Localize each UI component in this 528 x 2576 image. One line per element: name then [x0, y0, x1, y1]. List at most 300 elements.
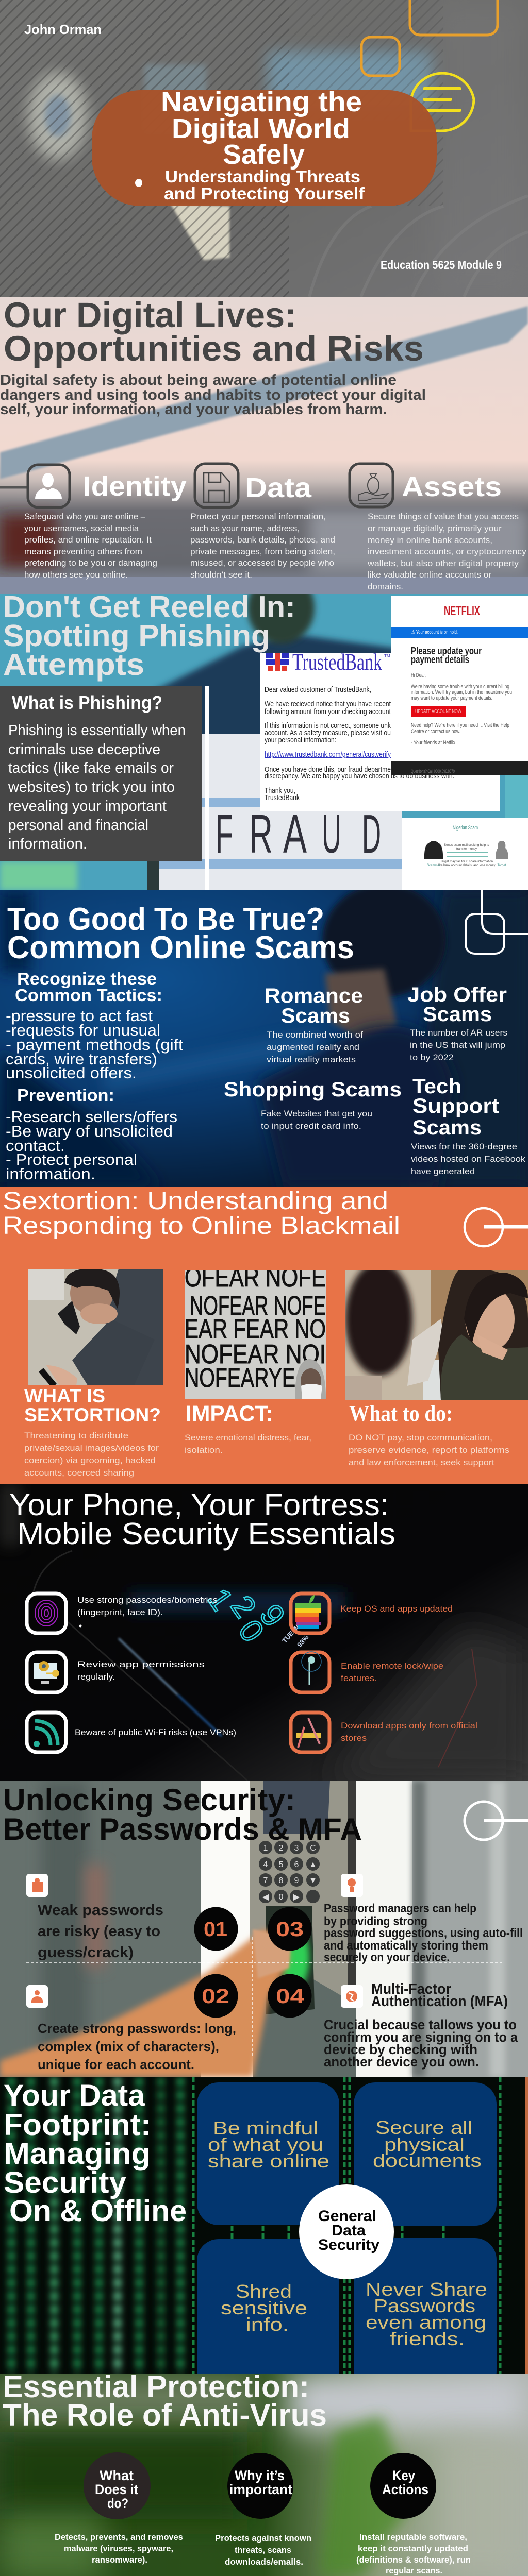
icon: globe [341, 1985, 363, 2008]
card: never share: Passwords [374, 2295, 475, 2316]
card: be mindful: of what you [208, 2134, 323, 2155]
column: impact: IMPACT: [186, 1401, 273, 1426]
panel: assets: domains. [368, 582, 403, 591]
heading: Better Passwords & MFA [3, 1812, 362, 1846]
title pill [92, 87, 437, 206]
author name: John Orman [24, 22, 102, 37]
fraud letters: A [283, 804, 307, 865]
heading: Opportunities and Risks [4, 329, 424, 368]
scam type: romance: Romance [265, 985, 363, 1007]
tip: passcodes: (fingerprint, face ID). [77, 1607, 163, 1617]
number badges: 02 [202, 1985, 229, 2008]
panel: data [190, 464, 335, 580]
icon: scammer [424, 841, 443, 859]
column: what is sextortion: WHAT IS [24, 1385, 105, 1406]
panel: netflix phishing email: Centre or contact us now. [411, 728, 460, 735]
column: why it's important: Why it’s [235, 2468, 285, 2483]
panel: what is phishing: tactics (like fake emails or [8, 760, 174, 776]
heading: Security [4, 2166, 126, 2199]
heading: Attempts [3, 648, 144, 682]
item 4: multi-factor authentication: Multi-Factor [371, 1981, 451, 1997]
heading [3, 1783, 362, 1846]
heading [9, 1488, 395, 1551]
main title: Navigating the [161, 87, 362, 117]
panel: nigerian scam diagram: Target [498, 864, 506, 867]
card: never share: even among [366, 2312, 486, 2333]
background: door lock fingerprint photo [0, 1781, 528, 2077]
photo: no fear wall [185, 1263, 326, 1399]
scam type: tech support: Support [412, 1095, 499, 1117]
column: what does it do: malware (viruses, spyware, [64, 2544, 173, 2553]
tip: official stores [291, 1713, 477, 1752]
item 4: multi-factor authentication: device by checking with [324, 2042, 477, 2057]
panel: what is phishing: Phishing is essentially when [8, 722, 186, 739]
panel: netflix phishing email: Questions? Call 0800.096.8879 [411, 769, 455, 774]
tip: permissions [27, 1652, 205, 1692]
column: why it's important [215, 2453, 311, 2567]
panel: netflix phishing email: UPDATE ACCOUNT NOW [415, 709, 461, 715]
scam type: tech support: Scams [412, 1116, 482, 1139]
keypad: 3 [294, 1844, 299, 1853]
column: what is sextortion [24, 1385, 161, 1478]
panel: netflix phishing email [391, 596, 528, 775]
tip: wifi [27, 1713, 236, 1752]
column: what to do: preserve evidence, report to platforms [349, 1445, 509, 1455]
card: shred [197, 2239, 339, 2394]
panel: netflix phishing email: - Your friends at Netflix [411, 740, 455, 746]
item 1: weak passwords: are risky (easy to [38, 1923, 160, 1940]
column: key actions: regular scans. [386, 2566, 442, 2575]
tip: passcodes: Use strong passcodes/biometrics [77, 1595, 218, 1605]
panel: trusted bank phishing email: following amount from your checking account [265, 707, 391, 716]
column: key actions: Key [392, 2468, 415, 2483]
scam type: job offer: in the US that will jump [410, 1040, 505, 1050]
column: key actions: (definitions & software), run [356, 2555, 471, 2565]
scam type: shopping [224, 1078, 402, 1131]
item 3: password managers [324, 1874, 523, 1964]
panel: trusted bank phishing email: discrepancy. We are happy you have chosen us to do business with. [265, 772, 454, 781]
card: secure documents [354, 2082, 497, 2226]
keypad: 6 [294, 1860, 299, 1869]
column: key actions: Actions [382, 2482, 428, 2497]
scam type: romance [265, 985, 363, 1064]
panel: trusted bank phishing email: account. As a safety measure, please visit ou [265, 728, 391, 737]
panel: netflix phishing email: Please update your [411, 646, 482, 657]
panel: identity: profiles, and online reputation. It [24, 535, 152, 545]
scam type: job offer: The number of AR users [410, 1028, 507, 1038]
keypad: C [310, 1844, 316, 1853]
slide 4: online scams [0, 890, 528, 1187]
panel: identity [0, 465, 187, 580]
icon: person [28, 465, 70, 507]
background: green matrix code [0, 2077, 528, 2374]
icon: puzzle piece [26, 1874, 48, 1897]
column: why it's important: Protects against known [215, 2533, 311, 2543]
column: key actions: keep it constantly updated [358, 2544, 468, 2553]
slide 1: title hero [0, 0, 528, 297]
number badges: 04 [276, 1985, 305, 2008]
center badge: general data security [299, 2184, 394, 2279]
phone clock [201, 1582, 292, 1649]
heading: Mobile Security Essentials [17, 1517, 395, 1551]
subtitle [135, 167, 365, 203]
scam type: tech support: Views for the 360-degree [411, 1142, 517, 1151]
number badges: 01 [204, 1918, 227, 1941]
center badge: general data security: Security [318, 2236, 380, 2253]
icon: target [496, 841, 508, 859]
main title [161, 87, 362, 170]
scam type: romance: Scams [281, 1005, 350, 1027]
text block: prevention: information. [6, 1165, 95, 1183]
icon: rainbow apple [291, 1594, 329, 1633]
background: person and fraud letter board [0, 572, 528, 890]
column: impact [185, 1401, 311, 1455]
heading: Your Data [4, 2079, 145, 2112]
text block: common tactics: -requests for unusual [6, 1021, 160, 1039]
column: what to do: What to do: [349, 1401, 453, 1426]
panel: data: Data [245, 472, 312, 503]
tip: remote lock: Enable remote lock/wipe [341, 1661, 443, 1671]
panel: what is phishing: information. [8, 836, 87, 852]
phone date: 98% [295, 1633, 310, 1649]
background: orange [0, 1187, 528, 1484]
tip: passcodes [27, 1594, 218, 1633]
item 1: weak passwords: Weak passwords [38, 1902, 163, 1919]
text block: common tactics: -pressure to act fast [6, 1007, 153, 1025]
panel: identity: your usernames, social media [24, 523, 139, 533]
text block: common tactics: - payment methods (gift [6, 1036, 183, 1054]
panel: what is phishing [0, 686, 202, 861]
panel: trusted bank phishing email: TM [384, 654, 390, 658]
dashed dividers [26, 1937, 502, 2056]
tip: remote lock: features. [341, 1673, 377, 1683]
icon: key [291, 1652, 329, 1692]
heading [4, 295, 424, 368]
card: never share: friends. [390, 2328, 465, 2349]
card: never share: Never Share [366, 2279, 487, 2300]
heading: Footprint: [4, 2108, 151, 2142]
column: what is sextortion: coercion) via grooming, hacked [24, 1455, 156, 1465]
card: be mindful: share online [208, 2150, 329, 2172]
panel: data: passwords, bank details, photos, and [190, 535, 335, 545]
decorative circle connector [465, 1802, 528, 1840]
background: dark phone photo [0, 1484, 528, 1781]
keypad: 8 [279, 1876, 284, 1885]
column: what does it do: ransomware). [92, 2555, 147, 2565]
text block: common tactics [6, 969, 183, 1082]
scam type: tech support: videos hosted on Facebook [411, 1154, 526, 1164]
heading [7, 902, 354, 965]
arrows between scammer and target [447, 853, 488, 857]
item 1: weak passwords [26, 1874, 163, 1961]
item 2: strong passwords: unique for each account. [38, 2057, 194, 2072]
photo: worried man with phone [28, 1269, 163, 1385]
icon: light bulb [341, 1874, 363, 1897]
icon: monitor and key [27, 1652, 66, 1692]
decorative outlines and menu icon [361, 0, 498, 131]
text block: prevention [6, 1086, 177, 1183]
scam type: job offer: Scams [423, 1003, 492, 1026]
scam type: tech support [411, 1075, 526, 1176]
tip: updates [291, 1594, 453, 1633]
item 3: password managers: Password managers can help [324, 1902, 476, 1916]
tip: official stores: stores [341, 1733, 367, 1743]
keypad [259, 1841, 320, 1903]
panel: assets: like valuable online accounts or [368, 570, 491, 580]
heading: Sextortion: Understanding and [3, 1188, 388, 1215]
tip: permissions: Review app permissions [77, 1659, 205, 1669]
text block: prevention: Prevention: [17, 1086, 114, 1105]
panel: what is phishing: personal and financial [8, 817, 148, 834]
panel: netflix phishing email: may want to update your payment details. [411, 695, 492, 701]
keypad: 4 [263, 1860, 268, 1869]
heading: Common Online Scams [7, 930, 354, 965]
intro text [0, 372, 426, 418]
fraud letters: F [216, 804, 233, 865]
column: what is sextortion: accounts, coerced sharing [24, 1468, 134, 1478]
item 4: multi-factor authentication: Crucial because tallows you to [324, 2017, 517, 2032]
slide 7: passwords and MFA [0, 1781, 528, 2077]
icon: floppy disk [195, 464, 238, 507]
heading: Responding to Online Blackmail [3, 1212, 400, 1240]
keypad: ▲ [309, 1860, 317, 1869]
card: secure documents: documents [373, 2150, 482, 2171]
phone clock: 9 [253, 1598, 292, 1633]
card: never share [354, 2238, 497, 2393]
panel: identity: pretending to be you or damaging [24, 558, 157, 568]
panel: assets: wallets, but also other digital property [367, 558, 519, 568]
decorative circle connector [465, 1208, 528, 1246]
column: what is sextortion: SEXTORTION? [24, 1404, 161, 1426]
item 2: strong passwords [26, 1985, 236, 2072]
column: why it's important: threats, scans [235, 2545, 291, 2555]
phone clock: 2 [224, 1589, 263, 1624]
keypad: 0 [279, 1893, 284, 1902]
column: key actions: Install reputable software, [359, 2532, 467, 2542]
heading [4, 2079, 187, 2228]
panel: netflix phishing email: Hi Dear, [411, 672, 426, 679]
main title: Digital World [172, 113, 350, 144]
slide 8: data footprint [0, 2077, 528, 2374]
panel: nigerian scam diagram: Scammer [427, 864, 440, 867]
scam type: job offer [407, 984, 507, 1062]
column: what is sextortion: private/sexual images/videos for [24, 1443, 159, 1453]
panel: trusted bank phishing email: If this information is not correct, someone unk [265, 721, 391, 730]
decorative connector and rounded rectangle [466, 890, 528, 954]
phone clock: 1 [201, 1582, 240, 1617]
panel: assets: investment accounts, or cryptocurrency [368, 547, 527, 556]
number badges [194, 1907, 311, 2018]
scam type: romance: virtual reality markets [267, 1055, 356, 1064]
heading: The Role of Anti-Virus [3, 2398, 327, 2432]
column: why it's important: important [229, 2482, 292, 2497]
tip: remote lock [291, 1652, 443, 1692]
heading: Your Phone, Your Fortress: [9, 1488, 389, 1522]
intro text: self, your information, and your valuables from harm. [0, 401, 387, 418]
fraud letters [216, 804, 381, 865]
scam type: shopping: Fake Websites that get you [261, 1109, 372, 1118]
panel: netflix phishing email: payment details [411, 654, 469, 666]
tip: wifi: Beware of public Wi-Fi risks (use VPNs) [75, 1727, 236, 1737]
panel: nigerian scam diagram: Nigerian Scam [453, 825, 478, 831]
panel: trusted bank phishing email: Once you have done this, our fraud departme [265, 765, 391, 774]
card: secure documents: Secure all [375, 2117, 472, 2138]
panel: assets: money in online bank accounts, [368, 535, 492, 545]
column: what does it do: Detects, prevents, and removes [55, 2532, 183, 2542]
slide 3: phishing [0, 594, 528, 890]
item 3: password managers: by providing strong [324, 1914, 427, 1928]
tip: updates: Keep OS and apps updated [340, 1604, 453, 1614]
card: shred: Shred [236, 2281, 292, 2302]
heading: Too Good To Be True? [7, 902, 324, 937]
column: impact: isolation. [185, 1445, 223, 1455]
item 4: multi-factor authentication: another device you own. [324, 2054, 479, 2070]
card: secure documents: physical [384, 2134, 465, 2155]
panel: nigerian scam diagram: Sends scam mail seeking help to [444, 844, 490, 847]
photo: friend comforting woman [345, 1270, 528, 1400]
text block: common tactics: Recognize these [17, 969, 157, 988]
column: what is sextortion: Threatening to distribute [24, 1431, 128, 1440]
background: blurred plant photo [0, 2374, 528, 2576]
panel: trusted bank phishing email: TrustedBank [265, 793, 300, 802]
phone date: TUE, MAR 9 [280, 1611, 312, 1645]
panel: what is phishing: What is Phishing? [12, 692, 162, 713]
panel: data: such as your name, address, [190, 523, 300, 533]
panel: netflix phishing email: ⚠ Your account is on hold. [411, 630, 458, 635]
background: blurred screen photo with diagonal stripes [0, 0, 528, 297]
card: be mindful [197, 2082, 339, 2225]
item 4: multi-factor authentication: Authentication (MFA) [371, 1993, 508, 2010]
panel: assets: Secure things of value that you access [368, 512, 519, 521]
column: what to do: and law enforcement, seek support [349, 1458, 494, 1467]
panel: identity: means preventing others from [24, 547, 142, 556]
keypad: 9 [294, 1876, 299, 1885]
card: shred: info. [246, 2314, 289, 2335]
panel: identity: Safeguard who you are online – [24, 512, 146, 521]
panel: nigerian scam diagram: Target may fall for it, share information [440, 860, 493, 863]
tip: permissions: regularly. [77, 1672, 115, 1682]
panel: trusted bank phishing email: We have recieved notice that you have recent [265, 700, 391, 708]
intro text: Digital safety is about being aware of potential online [0, 372, 397, 388]
panel: trusted bank phishing email: Thank you, [265, 786, 295, 795]
panel: assets [350, 464, 527, 591]
panel: data: shouldn't see it. [190, 570, 252, 580]
icon: app store [291, 1713, 329, 1752]
panel: what is phishing: criminals use deceptive [8, 741, 160, 758]
scam type: tech support: Tech [412, 1075, 461, 1098]
keypad: ◀ [262, 1893, 269, 1902]
slide 6: mobile security [0, 1484, 528, 1781]
panel: identity: Identity [83, 471, 187, 502]
column: what to do [349, 1401, 509, 1467]
column: key actions [356, 2453, 471, 2575]
subtitle: Understanding Threats [165, 167, 360, 186]
panel: data: Protect your personal information, [190, 512, 326, 521]
panel: identity: how others see you online. [24, 570, 128, 580]
heading: Unlocking Security: [3, 1783, 295, 1817]
column: why it's important: downloads/emails. [225, 2557, 303, 2567]
center badge: general data security: General [318, 2208, 376, 2225]
scam type: romance: The combined worth of [267, 1030, 363, 1040]
panel: what is phishing: revealing your important [8, 798, 167, 815]
scam type: job offer: Job Offer [407, 984, 507, 1006]
scam type: shopping: Shopping Scams [224, 1078, 402, 1101]
heading: Managing [4, 2137, 151, 2171]
slide 9: anti-virus [0, 2374, 528, 2576]
panel: assets: Assets [402, 471, 502, 502]
text block: prevention: contact. [6, 1137, 65, 1155]
icon: person [26, 1985, 48, 2008]
item 2: strong passwords: complex (mix of characters), [38, 2039, 219, 2054]
icon: bank logo [266, 653, 289, 671]
scam type: shopping: to input credit card info. [261, 1121, 361, 1131]
item 2: strong passwords: Create strong passwords: long, [38, 2021, 236, 2036]
item 4: multi-factor authentication [324, 1981, 518, 2070]
fraud letters: U [322, 804, 341, 865]
text block: prevention: - Protect personal [6, 1150, 137, 1168]
heading [3, 1188, 400, 1240]
background: hooded man on blue [0, 884, 528, 1187]
item 3: password managers: and automatically storing them [324, 1939, 488, 1953]
panel: data: private messages, from being stolen, [190, 547, 335, 556]
keypad: ▶ [293, 1893, 300, 1902]
scam type: romance: augmented reality and [267, 1042, 359, 1052]
background: laptop photo [0, 297, 528, 594]
card: shred: sensitive [221, 2297, 307, 2318]
keypad: 1 [263, 1844, 268, 1853]
panel: nigerian scam diagram: like bank account details, and lose money [438, 864, 496, 867]
panel: data: misused, or accessed by people who [190, 558, 334, 568]
panel: trusted bank phishing email [260, 649, 500, 811]
panel: nigerian scam diagram: transfer money [456, 848, 477, 851]
panel: nigerian scam diagram [402, 818, 528, 890]
column: impact: Severe emotional distress, fear, [185, 1433, 311, 1443]
keypad: 2 [279, 1844, 284, 1853]
icon: wifi [27, 1713, 66, 1752]
card: be mindful: Be mindful [213, 2117, 318, 2139]
heading: On & Offline [9, 2194, 187, 2228]
heading: Spotting Phishing [3, 619, 270, 653]
panel: trusted bank phishing email: http://www.trustedbank.com/general/custverify [265, 750, 391, 759]
phone clock: 0 [232, 1614, 271, 1649]
column: what does it do [55, 2452, 183, 2565]
item 1: weak passwords: guess/crack) [38, 1944, 134, 1961]
number badges: 03 [276, 1918, 304, 1941]
keypad: ▼ [309, 1876, 317, 1885]
slide 3: phishing: D [362, 804, 381, 865]
icon: fingerprint [27, 1594, 66, 1633]
item 4: multi-factor authentication: confirm you are signing on to a [324, 2029, 518, 2045]
scam type: job offer: to by 2022 [410, 1053, 454, 1062]
slide 2: digital lives [0, 297, 528, 594]
column: what to do: DO NOT pay, stop communication, [349, 1433, 492, 1443]
panel: netflix phishing email: NETFLIX [444, 604, 480, 618]
course label: Education 5625 Module 9 [381, 258, 502, 272]
intro text: dangers and using tools and habits to protect your digital [0, 387, 426, 403]
subtitle: and Protecting Yourself [164, 184, 365, 203]
column: what does it do: do? [107, 2496, 128, 2511]
center badge: general data security: Data [332, 2222, 366, 2239]
panel: what is phishing: websites) to trick you into [8, 779, 175, 795]
tip: official stores: Download apps only from official [341, 1721, 477, 1731]
heading [3, 2369, 327, 2432]
panel: trusted bank phishing email: your personal information: [265, 736, 336, 744]
keypad: 5 [279, 1860, 284, 1869]
text block: common tactics: cards, wire transfers) [6, 1050, 157, 1068]
column: what does it do: Does it [95, 2482, 138, 2497]
text block: prevention: -Be wary of unsolicited [6, 1122, 173, 1140]
panel: trusted bank phishing email: Dear valued customer of TrustedBank, [265, 685, 371, 694]
